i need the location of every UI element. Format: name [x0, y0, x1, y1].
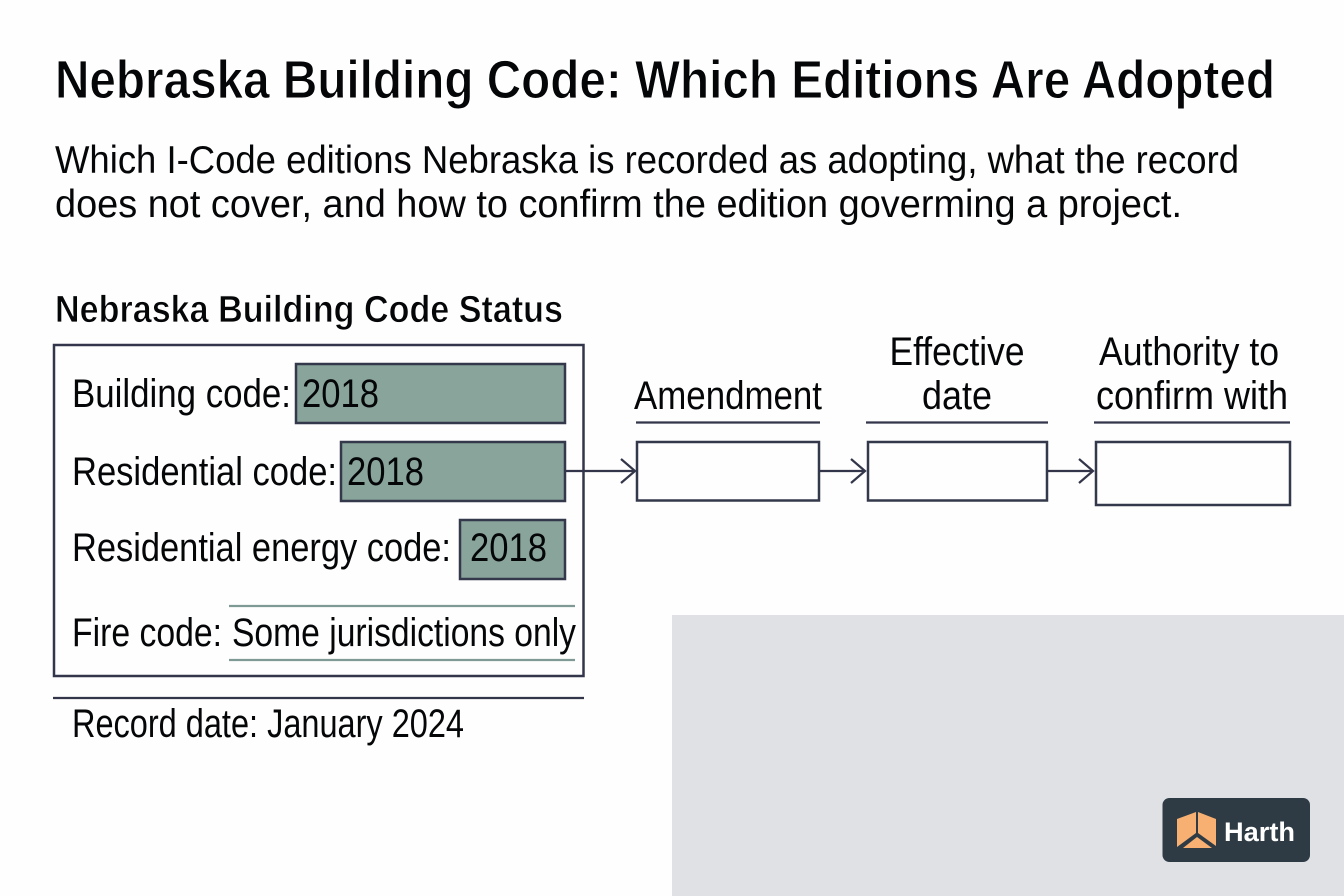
logo badge [1162, 798, 1310, 862]
logo text: Harth [1224, 817, 1295, 847]
row: residential energy code: 2018 [470, 526, 547, 570]
row: fire code: Some jurisdictions only [232, 611, 576, 655]
row: residential code: 2018 [347, 450, 424, 494]
row: residential energy code: Residential energy code: [72, 526, 451, 570]
row: building code: Building code: [72, 372, 291, 416]
column: effective date [866, 330, 1048, 500]
arrow: amendment to effective date [819, 459, 865, 483]
subtitle: does not cover, and how to confirm the edition goverming a project. [55, 183, 1182, 226]
subtitle: Which I-Code editions Nebraska is recorded as adopting, what the record [55, 139, 1239, 182]
column: effective date: Effective [890, 330, 1024, 374]
row: residential code: Residential code: [72, 450, 337, 494]
row: fire code: Fire code: [72, 611, 222, 655]
record date: Record date: January 2024 [72, 702, 464, 746]
column: amendment: Amendment [634, 374, 822, 418]
column: authority to confirm with: confirm with [1096, 374, 1288, 418]
column: effective date: date [922, 374, 992, 418]
row: fire code [72, 606, 576, 660]
grey panel [672, 615, 1344, 896]
column: amendment [634, 374, 822, 500]
row: residential code [72, 442, 565, 501]
arrow: status to amendment [566, 459, 635, 483]
row: building code: 2018 [302, 372, 379, 416]
panel: code status [54, 345, 584, 676]
subtitle [55, 139, 1239, 226]
icon: open box [1177, 812, 1216, 848]
section heading: Nebraska Building Code Status [55, 289, 563, 331]
column: authority to confirm with [1094, 330, 1290, 505]
row: residential energy code [72, 520, 565, 579]
arrow: effective date to authority [1048, 459, 1093, 483]
column: authority to confirm with: Authority to [1099, 330, 1279, 374]
row: building code [72, 364, 565, 423]
